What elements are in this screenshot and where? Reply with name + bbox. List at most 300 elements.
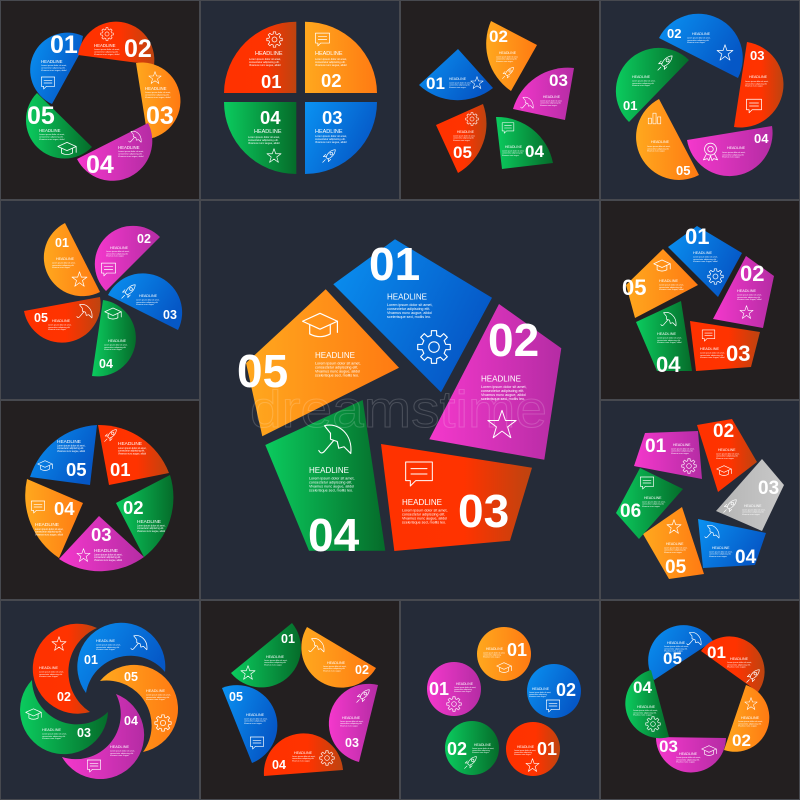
segment 04 magenta [687, 126, 773, 176]
segment 02 blue: 02 [667, 26, 681, 41]
circle 02 blue: consectetur adipiscing. [529, 693, 548, 696]
segment 05 orange: 05 [622, 275, 646, 300]
sector 04 green: consectetur adipiscing elit. [502, 152, 524, 155]
segment 03 magenta [656, 737, 726, 772]
crescent 05 orange: 05 [124, 670, 138, 684]
segment 04 orange [25, 479, 83, 558]
circle 02 green: Vivamus nunc augue. [472, 752, 490, 754]
segment 04 red: 04 [272, 758, 286, 772]
segment 02 blue: Lorem ipsum dolor sit amet, [687, 36, 711, 40]
segment 04 red: Lorem ipsum dolor sit amet, [292, 755, 316, 758]
segment 02 green: 02 [123, 497, 144, 518]
segment 03 orange: HEADLINE [145, 86, 167, 91]
segment 05 orange: HEADLINE [315, 351, 355, 360]
blade 01 orange: Vivamus nunc augue. [52, 267, 71, 269]
segment 03 red: 03 [726, 341, 750, 366]
panel: five half discs, row 4 second [222, 623, 378, 776]
sector 03 magenta: Lorem ipsum dolor sit amet, [540, 100, 563, 102]
segment 01 blue: HEADLINE [693, 251, 712, 255]
segment 04 orange: consectetur adipiscing elit. [35, 531, 62, 534]
quadrant 04 green: 04 [260, 107, 281, 128]
crescent 04 magenta: consectetur adipiscing elit. [110, 752, 134, 755]
segment 04 green: consectetur adipiscing elit. [633, 711, 657, 714]
segment 04 magenta: HEADLINE [118, 145, 140, 150]
segment 05 orange [237, 289, 399, 436]
segment 04 magenta: Vivamus nunc augue. [722, 157, 741, 159]
segment 02 orange: Vivamus nunc augue. [738, 726, 758, 728]
segment 02 red: Vivamus nunc augue, alidol [94, 54, 120, 56]
blade 05 red: consectetur adipiscing elit. [48, 326, 71, 329]
watermark: dreamstime [250, 381, 547, 439]
segment 05 orange: Lorem ipsum dolor sit amet, [315, 362, 360, 366]
circle 02 green: consectetur adipiscing. [472, 749, 491, 752]
panel: outer background row 4, third [400, 600, 600, 800]
segment 02 red: Lorem ipsum dolor sit amet, [94, 48, 120, 51]
segment 01 green: 01 [623, 98, 637, 113]
segment 05 green: consectetur adipiscing elit. [39, 136, 64, 139]
segment 04 green: HEADLINE [309, 466, 349, 475]
segment 01 red: Lorem ipsum dolor sit amet, [118, 447, 147, 450]
circle 01 magenta: HEADLINE [456, 682, 474, 686]
segment 04 blue: 04 [735, 547, 757, 568]
segment 01 blue: Vivamus nunc augue, alidol [387, 311, 432, 315]
crescent 05 orange: Vivamus nunc augue. [146, 699, 166, 701]
segment 02 red [78, 22, 154, 65]
segment 03 magenta [329, 684, 378, 762]
segment 03 red: scelerisque sed, mollis leo. [402, 520, 446, 524]
sector 05 red: HEADLINE [457, 130, 475, 134]
segment 03 red: consectetur adipiscing elit. [745, 82, 768, 85]
quadrant 01 red [224, 22, 296, 93]
segment 02 green: consectetur adipiscing elit. [137, 527, 164, 530]
segment 03 magenta: Vivamus nunc augue. [676, 762, 696, 764]
sector 02 orange [486, 21, 537, 91]
segment 02 magenta [713, 256, 774, 328]
crescent 01 blue: consectetur adipiscing elit. [96, 646, 120, 649]
segment 01 blue: HEADLINE [387, 292, 427, 302]
segment 03 red [690, 321, 760, 371]
segment 02 red: Vivamus nunc augue. [716, 458, 735, 460]
segment 02 red: 02 [124, 35, 152, 63]
segment 05 blue: HEADLINE [246, 713, 265, 717]
quadrant 03 blue: consectetur adipiscing elit. [315, 137, 346, 141]
segment 01 green: HEADLINE [266, 655, 285, 659]
quadrant 02 orange: 02 [321, 70, 342, 91]
segment 03 magenta: HEADLINE [342, 716, 361, 720]
segment 05 orange: scelerisque sed, mollis leo. [315, 373, 359, 377]
circle 02 blue: Vivamus nunc augue. [529, 696, 547, 698]
segment 05 orange: HEADLINE [666, 542, 684, 546]
sector 04 green: HEADLINE [505, 145, 523, 149]
segment 05 blue [30, 425, 97, 485]
panel: outer background row 2, right [600, 200, 800, 400]
blade 02 magenta: 02 [137, 232, 151, 246]
panel: outer background row 3, left [0, 400, 200, 600]
segment 01 green: Lorem ipsum dolor sit amet, [632, 80, 656, 82]
circle 01 orange [477, 627, 531, 681]
panel: ring of half discs, row 4 right [625, 625, 769, 772]
segment 05 orange: Lorem ipsum dolor sit amet, [664, 546, 688, 550]
segment 02 magenta: 02 [488, 314, 539, 366]
panel: outer background row 2, left [0, 200, 200, 400]
segment 05 blue: consectetur adipiscing elit. [664, 647, 688, 650]
crescent 02 red [33, 624, 97, 714]
segment 03 red: Lorem ipsum dolor sit amet, [745, 80, 769, 83]
blade 03 blue: consectetur adipiscing elit. [136, 301, 159, 304]
segment 04 blue: Lorem ipsum dolor sit amet, [709, 550, 733, 554]
sector 05 red: consectetur adipiscing elit. [453, 137, 475, 140]
segment 03 magenta: 03 [659, 737, 678, 756]
blade 02 magenta: Vivamus nunc augue. [106, 256, 125, 258]
segment 05 orange: Lorem ipsum dolor sit amet, [647, 145, 671, 148]
crescent 05 orange: Lorem ipsum dolor sit amet, [146, 694, 171, 696]
segment 03 red: Lorem ipsum dolor sit amet, [402, 508, 448, 512]
segment 03 magenta: consectetur adipiscing elit. [676, 758, 700, 761]
segment 01 magenta: consectetur adipiscing elit. [671, 450, 694, 453]
sector 05 red: Vivamus nunc augue. [453, 140, 471, 142]
segment 04 green: scelerisque sed, mollis leo. [309, 488, 353, 492]
segment 05 blue: Vivamus nunc augue. [664, 651, 684, 653]
segment 04 green: HEADLINE [637, 705, 656, 709]
segment 04 green: Lorem ipsum dolor sit amet, [633, 709, 658, 712]
segment 05 green: Vivamus nunc augue, alidol [39, 139, 65, 141]
segment 01 green: Vivamus nunc augue. [632, 85, 651, 87]
segment 02 magenta: consectetur adipiscing elit. [481, 389, 524, 393]
segment 02 magenta [429, 304, 561, 460]
sector 03 magenta: consectetur adipiscing elit. [540, 102, 562, 105]
segment 03 magenta: 03 [345, 736, 359, 750]
quadrant 04 green: HEADLINE [254, 129, 282, 135]
segment 03 grey: Vivamus nunc augue. [742, 514, 761, 516]
crescent 01 blue: Vivamus nunc augue. [96, 649, 116, 651]
segment 04 green: HEADLINE [657, 332, 676, 336]
segment 03 red: Vivamus nunc augue. [745, 86, 764, 88]
circle 01 magenta [427, 662, 481, 716]
segment 05 blue: 05 [66, 459, 87, 480]
segment 03 red [381, 444, 532, 551]
segment 02 green: Vivamus nunc augue, alidol [137, 531, 166, 533]
segment 06 green: Lorem ipsum dolor sit amet, [642, 500, 666, 504]
crescent 03 green [20, 680, 108, 754]
segment 05 green: 05 [27, 102, 55, 130]
segment 03 red: consectetur adipiscing elit. [700, 354, 724, 357]
sector 01 blue: Lorem ipsum dolor sit amet, [449, 82, 472, 84]
blade 01 orange: Lorem ipsum dolor sit amet, [52, 262, 76, 264]
segment 01 blue [30, 31, 83, 104]
sector 02 orange: HEADLINE [499, 51, 517, 55]
circle 01 magenta: 01 [429, 679, 449, 699]
quadrant 01 red: Lorem ipsum dolor sit amet, [249, 57, 281, 61]
panel: pinwheel, row 2 left [24, 223, 182, 376]
blade 01 orange: 01 [55, 236, 69, 250]
circle 02 blue: 02 [556, 680, 576, 700]
segment 04 green: consectetur adipiscing elit. [309, 480, 352, 484]
panel: outer background row 1, third [400, 0, 600, 200]
quadrant 01 red: Vivamus nunc augue, alidol [249, 63, 281, 67]
circle 02 green: HEADLINE [474, 743, 492, 747]
segment 01 blue: HEADLINE [41, 59, 63, 64]
sector 05 red [436, 104, 486, 173]
crescent 04 magenta: Lorem ipsum dolor sit amet, [110, 750, 135, 752]
segment 03 red: Vivamus nunc augue, alidol [700, 357, 725, 359]
segment 05 blue: Vivamus nunc augue, alidol [57, 451, 86, 453]
segment 01 green: 01 [281, 632, 295, 646]
segment 02 red: consectetur adipiscing elit. [716, 455, 739, 458]
segment 01 blue: Lorem ipsum dolor sit amet, [693, 256, 718, 258]
segment 01 red: 01 [707, 643, 726, 662]
sector 04 green: Lorem ipsum dolor sit amet, [502, 150, 525, 152]
blade 04 green: consectetur adipiscing elit. [104, 346, 127, 349]
segment 02 green [116, 475, 173, 557]
segment 05 blue: Lorem ipsum dolor sit amet, [664, 645, 689, 648]
segment 03 orange: consectetur adipiscing elit. [145, 94, 170, 97]
segment 04 magenta: 04 [754, 131, 769, 146]
segment 02 red: Lorem ipsum dolor sit amet, [716, 452, 740, 456]
blade 01 orange: consectetur adipiscing elit. [52, 264, 75, 267]
segment 01 blue: 01 [369, 238, 420, 290]
crescent 03 green: HEADLINE [42, 728, 61, 732]
segment 03 magenta: 03 [91, 524, 112, 545]
segment 05 orange: consectetur adipiscing elit. [647, 147, 670, 150]
blade 05 red: Lorem ipsum dolor sit amet, [48, 324, 72, 326]
segment 05 blue: Lorem ipsum dolor sit amet, [244, 718, 268, 720]
segment 06 green: consectetur adipiscing elit. [642, 503, 665, 506]
segment 05 orange: 05 [237, 345, 288, 397]
segment 02 magenta: Vivamus nunc augue, alidol [737, 299, 762, 301]
blade 02 magenta: consectetur adipiscing elit. [106, 252, 129, 255]
panel: central background [200, 200, 600, 600]
segment 04 red: HEADLINE [294, 751, 313, 755]
segment 03 magenta: Vivamus nunc augue. [340, 725, 359, 727]
segment 03 magenta: HEADLINE [94, 548, 118, 554]
blade 03 blue [108, 273, 182, 330]
blade 03 blue: 03 [163, 308, 177, 322]
segment 02 orange: Lorem ipsum dolor sit amet, [738, 720, 763, 723]
sector 01 blue: Vivamus nunc augue. [449, 87, 467, 89]
segment 03 red: Lorem ipsum dolor sit amet, [700, 352, 725, 354]
quadrant 01 red: HEADLINE [255, 51, 283, 57]
sector 03 magenta: 03 [549, 71, 568, 90]
segment 04 green [636, 301, 692, 377]
blade 03 blue: HEADLINE [139, 294, 158, 298]
segment 03 grey: Lorem ipsum dolor sit amet, [742, 508, 766, 512]
segment 04 orange: 04 [54, 498, 75, 519]
blade 05 red: Vivamus nunc augue. [48, 329, 67, 331]
circle 02 blue [527, 664, 581, 718]
circle 02 green: Lorem ipsum dolor sit amet, [472, 747, 495, 750]
segment 05 orange: Vivamus nunc augue, alidol [315, 369, 360, 373]
crescent 01 blue: HEADLINE [96, 639, 115, 643]
segment 05 orange [622, 249, 698, 318]
quadrant 02 orange: HEADLINE [315, 51, 343, 57]
segment 03 magenta [59, 516, 144, 571]
circle 01 orange: Vivamus nunc augue. [483, 657, 501, 659]
segment 03 orange: Vivamus nunc augue, alidol [145, 97, 171, 99]
segment 01 blue: consectetur adipiscing elit. [387, 307, 430, 311]
segment 04 blue [698, 519, 766, 568]
segment 05 orange: consectetur adipiscing elit. [315, 365, 358, 369]
segment 03 grey [716, 459, 784, 531]
panel: outer background row 3, right [600, 400, 800, 600]
panel: four quadrant circle, row 1 second [224, 22, 377, 174]
segment 05 blue: consectetur adipiscing elit. [244, 720, 267, 723]
quadrant 04 green: Lorem ipsum dolor sit amet, [248, 135, 280, 139]
segment 02 orange: Vivamus nunc augue. [323, 670, 342, 672]
crescent 05 orange: consectetur adipiscing elit. [146, 696, 170, 699]
panel: outer background row 4, right [600, 600, 800, 800]
segment 03 red: Vivamus nunc augue, alidol [402, 516, 447, 520]
quadrant 04 green [224, 102, 296, 174]
segment 04 red: consectetur adipiscing elit. [292, 757, 315, 760]
circle 01 orange: 01 [507, 640, 527, 660]
segment 04 blue: consectetur adipiscing elit. [709, 553, 732, 556]
segment 05 orange: consectetur adipiscing elit. [659, 286, 683, 289]
panel: five circles, row 4 third [427, 627, 581, 776]
crescent 03 green: 03 [77, 726, 91, 740]
segment 01 red [701, 636, 765, 692]
panel: circle with star cut-out, row 3 left [25, 425, 173, 571]
segment 02 orange: 02 [355, 663, 369, 677]
sector 05 red: 05 [453, 143, 472, 162]
segment 04 green: Vivamus nunc augue, alidol [657, 342, 682, 344]
circle 01 red [506, 722, 560, 776]
segment 02 blue: Vivamus nunc augue. [687, 42, 706, 44]
circle 01 red: Lorem ipsum dolor sit amet, [514, 749, 537, 752]
sector 01 blue: HEADLINE [449, 77, 467, 81]
segment 01 blue: 01 [50, 31, 78, 59]
segment 05 orange: 05 [676, 163, 690, 178]
crescent 02 red: consectetur adipiscing elit. [39, 673, 63, 676]
segment 03 magenta: Lorem ipsum dolor sit amet, [340, 720, 364, 723]
segment 05 blue: Lorem ipsum dolor sit amet, [57, 444, 86, 448]
blade 02 magenta: HEADLINE [110, 246, 129, 250]
blade 01 orange: HEADLINE [56, 257, 75, 261]
segment 03 orange: Lorem ipsum dolor sit amet, [145, 91, 171, 94]
segment 05 blue: consectetur adipiscing elit. [57, 447, 84, 450]
segment 05 blue: HEADLINE [57, 439, 81, 445]
circle 01 red: 01 [537, 739, 557, 759]
segment 01 magenta: Lorem ipsum dolor sit amet, [671, 448, 695, 450]
quadrant 03 blue: HEADLINE [315, 129, 343, 135]
crescent 01 blue: Lorem ipsum dolor sit amet, [96, 644, 121, 646]
circle 02 green: 02 [447, 739, 467, 759]
segment 06 green: Vivamus nunc augue. [642, 506, 661, 508]
circle 01 orange: consectetur adipiscing. [483, 654, 502, 657]
segment 02 magenta: Lorem ipsum dolor sit amet, [481, 385, 526, 389]
segment 01 red: Lorem ipsum dolor sit amet, [727, 661, 752, 664]
segment 02 green: HEADLINE [137, 519, 161, 525]
quadrant 01 red: 01 [261, 71, 282, 92]
segment 04 magenta: HEADLINE [727, 146, 746, 150]
blade 04 green: Vivamus nunc augue. [104, 349, 123, 351]
circle 01 red: Vivamus nunc augue. [514, 754, 532, 756]
segment 02 orange: consectetur adipiscing elit. [738, 722, 762, 725]
circle 01 orange: HEADLINE [486, 647, 504, 651]
segment 01 green: consectetur adipiscing elit. [632, 82, 655, 85]
segment 03 red: 03 [750, 48, 764, 63]
segment 02 magenta: 02 [740, 261, 764, 286]
segment 02 red: HEADLINE [94, 43, 116, 48]
segment 02 blue [659, 14, 743, 78]
crescent 04 magenta: HEADLINE [110, 745, 129, 749]
segment 04 red: Vivamus nunc augue. [292, 760, 311, 762]
segment 02 magenta: HEADLINE [481, 374, 521, 384]
crescent 01 blue: 01 [84, 653, 98, 667]
segment 05 green [26, 93, 92, 159]
segment 03 magenta: HEADLINE [679, 752, 698, 756]
segment 05 blue: 05 [229, 690, 243, 704]
quadrant 04 green: Vivamus nunc augue, alidol [248, 141, 280, 145]
blade 02 magenta [95, 226, 160, 291]
segment 05 blue: 05 [663, 649, 682, 668]
segment 04 magenta: consectetur adipiscing elit. [722, 153, 745, 156]
segment 04 green: 04 [308, 509, 360, 561]
segment 05 orange: Vivamus nunc augue. [647, 151, 666, 153]
segment 05 blue [222, 685, 277, 763]
segment 02 red: HEADLINE [718, 448, 736, 452]
segment 05 orange: HEADLINE [659, 279, 678, 283]
segment 01 green: HEADLINE [632, 75, 651, 79]
crescent 02 red: 02 [57, 690, 71, 704]
segment 02 red: 02 [713, 421, 734, 442]
quadrant 02 orange: Lorem ipsum dolor sit amet, [315, 57, 347, 61]
sector 02 orange: consectetur adipiscing elit. [496, 58, 518, 61]
crescent 03 green: Vivamus nunc augue. [42, 738, 62, 740]
panel: outer background row 1, second [200, 0, 400, 200]
quadrant 03 blue [305, 102, 377, 174]
segment 02 magenta: consectetur adipiscing elit. [737, 296, 761, 299]
segment 01 blue: consectetur adipiscing elit. [693, 258, 717, 261]
blade 01 orange [44, 223, 100, 296]
quadrant 01 red: consectetur adipiscing elit. [249, 60, 280, 64]
blade 04 green: 04 [99, 357, 113, 371]
circle 02 blue: Lorem ipsum dolor sit amet, [529, 691, 552, 694]
segment 01 red: Vivamus nunc augue. [727, 667, 747, 669]
blade 05 red: 05 [34, 311, 48, 325]
crescent 04 magenta [62, 694, 144, 779]
segment 04 green: Vivamus nunc augue, alidol [309, 484, 354, 488]
segment 01 green: Lorem ipsum dolor sit amet, [264, 659, 288, 662]
segment 03 grey: 03 [758, 478, 779, 499]
crescent 03 green: consectetur adipiscing elit. [42, 735, 66, 738]
segment 05 orange: HEADLINE [651, 140, 670, 144]
segment 04 magenta: 04 [86, 151, 114, 179]
segment 01 blue: consectetur adipiscing elit. [41, 67, 66, 70]
quadrant 02 orange: consectetur adipiscing elit. [315, 60, 346, 64]
segment 06 green [616, 468, 683, 539]
quadrant 03 blue: 03 [322, 107, 343, 128]
segment 03 magenta: Vivamus nunc augue, alidol [94, 560, 123, 562]
panel: central pentagon [237, 238, 561, 561]
segment 05 green: HEADLINE [39, 128, 61, 133]
segment 04 orange: HEADLINE [35, 522, 59, 528]
segment 01 red: HEADLINE [118, 441, 142, 447]
segment 04 green [625, 670, 669, 738]
segment 01 red: 01 [110, 459, 131, 480]
segment 05 orange [636, 99, 699, 180]
segment 03 grey: consectetur adipiscing elit. [742, 511, 765, 514]
blade 03 blue: Vivamus nunc augue. [136, 304, 155, 306]
segment 04 red [264, 733, 343, 776]
segment 02 orange [301, 627, 376, 688]
segment 04 magenta: Vivamus nunc augue, alidol [118, 156, 144, 158]
circle 01 red: HEADLINE [517, 745, 535, 749]
blade 05 red: HEADLINE [52, 319, 71, 323]
sector 04 green: Vivamus nunc augue. [502, 155, 520, 157]
circle 01 orange: Lorem ipsum dolor sit amet, [483, 652, 506, 654]
segment 03 red: HEADLINE [749, 75, 768, 79]
segment 01 blue: Vivamus nunc augue, alidol [41, 70, 67, 72]
